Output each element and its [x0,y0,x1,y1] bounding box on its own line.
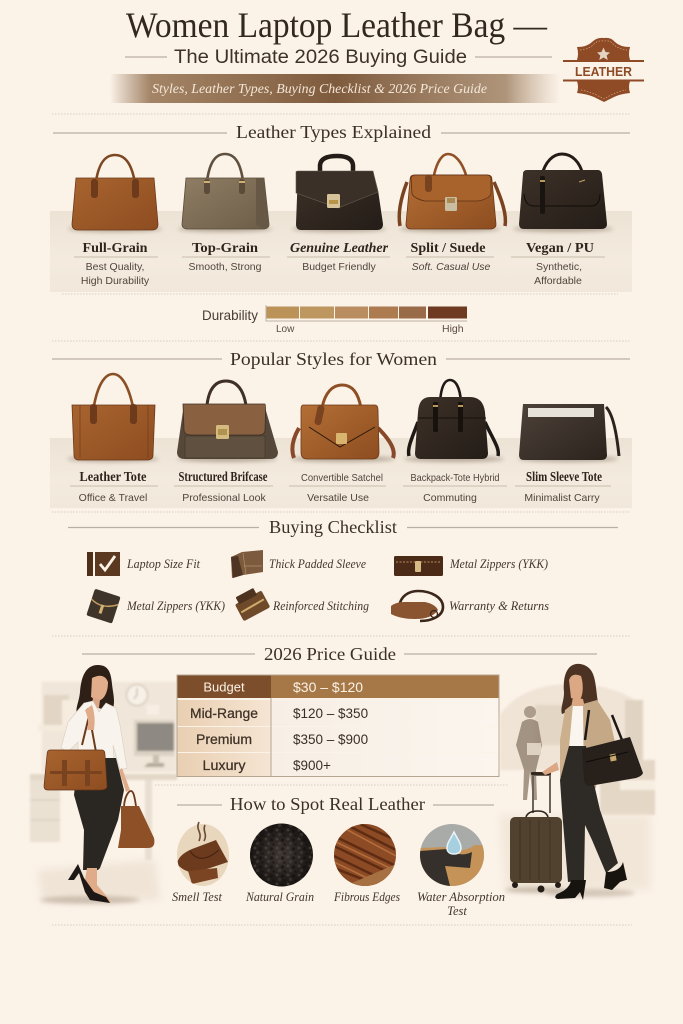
icon: smell test [177,822,229,886]
icon: reinforced stitching [232,585,270,621]
badge: leather [563,38,644,102]
heading: spot real leather: How to Spot Real Leather [230,794,425,814]
label: backpack-tote hybrid [403,472,507,504]
panel: leather types band [50,211,632,292]
label: full-grain: Best Quality, [86,261,144,273]
row: mid-range: $120 – $350 [293,706,368,721]
row: budget: $30 – $120 [293,679,363,695]
icon: natural grain [250,824,313,886]
row: luxury: Luxury [202,758,246,773]
bag: backpack tote hybrid [404,380,504,462]
label: backpack-tote hybrid: Backpack-Tote Hybrid [410,472,500,484]
label: slim sleeve tote: Minimalist Carry [524,492,600,504]
label: convertible satchel: Versatile Use [307,492,369,504]
label: genuine leather: Budget Friendly [302,261,377,273]
icon: water absorption [420,824,484,886]
bag: split suede [399,154,505,232]
label: structured briefcase: Structured Brifcase [178,470,268,485]
captions [172,890,505,918]
caption: smell test: Smell Test [172,890,223,904]
row: premium: Premium [196,732,252,747]
caption: fibrous edges: Fibrous Edges [333,890,400,904]
row: luxury [177,753,499,776]
label: vegan pu: Affordable [534,275,582,287]
panel: checklist [86,549,549,624]
scene: office right [500,664,655,900]
icon: zipper pouch [86,589,121,624]
figure: suitcase [505,772,565,893]
text: warranty returns: Warranty & Returns [449,598,549,613]
style labels [70,470,611,504]
bag: vegan pu [513,154,613,232]
bag: full-grain [68,155,162,232]
durability scale: High [442,323,464,335]
durability scale: Durability [202,307,258,323]
icon: fibrous edges [334,824,396,888]
row: budget: Budget [203,680,245,694]
heading: price guide: 2026 Price Guide [264,644,396,664]
panel: styles band [50,438,632,508]
heading: popular styles: Popular Styles for Women [230,349,437,369]
heading: leather types: Leather Types Explained [236,122,431,142]
label: leather tote: Leather Tote [80,470,146,485]
heading: buying checklist: Buying Checklist [269,517,397,537]
row: premium [177,727,499,752]
icon: laptop size check [87,549,120,576]
icon: padded sleeve [231,550,263,578]
label: split suede [406,241,494,273]
caption: water absorption test: Test [447,904,467,918]
label: top-grain: Smooth, Strong [189,261,262,273]
label: structured briefcase: Professional Look [182,492,266,504]
label: genuine leather [287,241,390,273]
scene: office left [30,665,177,904]
price table [177,675,499,776]
figure: background silhouette [516,706,542,800]
subtitle: The Ultimate 2026 Buying Guide [174,47,467,68]
text: thick padded sleeve: Thick Padded Sleeve [269,556,366,571]
row: budget [177,675,499,698]
figure: woman with luggage [542,664,643,900]
icon: warranty bag [391,591,443,621]
text: reinforced stitching: Reinforced Stitching [272,598,369,613]
label: structured briefcase [174,470,273,504]
label: convertible satchel: Convertible Satchel [301,472,383,484]
label: slim sleeve tote: Slim Sleeve Tote [526,470,602,485]
label: full-grain: Full-Grain [82,241,148,256]
bag: leather tote [67,374,159,462]
row: mid-range [177,700,499,726]
label: slim sleeve tote [515,470,611,504]
caption: water absorption test [417,890,505,918]
row: premium: $350 – $900 [293,732,368,747]
label: split suede: Soft. Casual Use [412,261,491,273]
bag: genuine leather [292,156,386,232]
label: top-grain [182,241,270,273]
text: metal zippers: Metal Zippers (YKK) [449,556,548,571]
bag: structured briefcase [177,381,278,462]
bag: top-grain [178,154,272,232]
caption: natural grain: Natural Grain [245,890,314,904]
label: genuine leather: Genuine Leather [290,241,389,256]
banner: Styles, Leather Types, Buying Checklist & 2026 Price Guide [152,81,487,96]
label: backpack-tote hybrid: Commuting [423,492,477,504]
label: leather tote: Office & Travel [79,492,147,504]
row: luxury: $900+ [293,758,331,773]
text: metal zippers 2: Metal Zippers (YKK) [126,598,225,613]
label: convertible satchel [289,472,386,504]
label: vegan pu: Synthetic, [536,261,582,273]
durability scale [202,305,467,335]
icon: metal zipper case [394,556,443,576]
durability scale: Low [276,324,295,335]
label: vegan pu: Vegan / PU [526,241,594,256]
text: laptop size fit: Laptop Size Fit [126,556,200,571]
leather type labels [74,241,605,287]
title: Women Laptop Leather Bag — [126,5,548,45]
banner [110,74,560,103]
label: split suede: Split / Suede [410,241,486,256]
bag: slim sleeve tote [518,404,619,462]
row: mid-range: Mid-Range [190,706,258,721]
label: full-grain [74,241,158,287]
label: top-grain: Top-Grain [192,241,258,256]
bag: convertible satchel [291,385,395,462]
label: leather tote [70,470,158,504]
label: full-grain: High Durability [81,275,150,287]
label: vegan pu [511,241,605,287]
figure: woman with tote [40,665,154,904]
caption: water absorption test: Water Absorption [417,890,505,904]
badge: leather: LEATHER [575,64,633,79]
